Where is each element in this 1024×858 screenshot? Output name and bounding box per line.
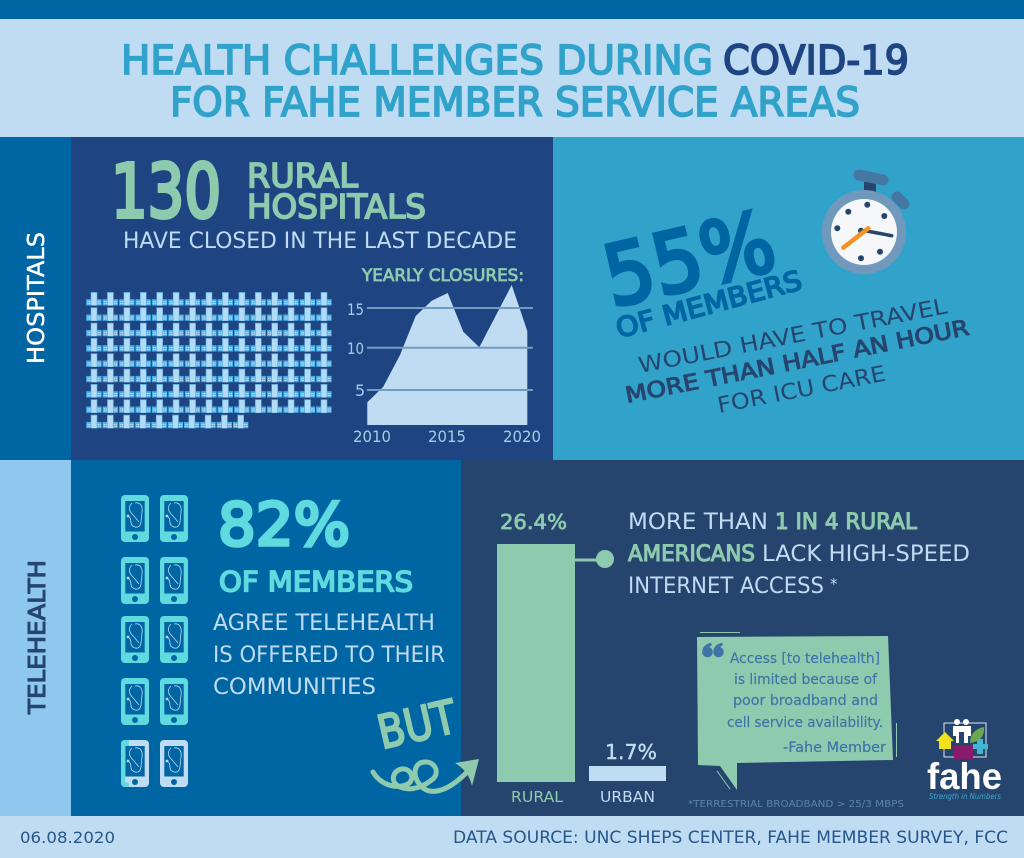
big number 130: 130 — [111, 149, 221, 235]
title — [121, 38, 909, 126]
logo: fahe — [927, 719, 1002, 801]
icon grid: phones with stethoscopes — [121, 495, 188, 787]
callout: member quote: cell service availability. — [727, 715, 883, 731]
panel: hospitals section label — [0, 137, 71, 460]
icon: quote marks — [702, 643, 724, 657]
callout: BUT with arrow: BUT — [372, 689, 462, 760]
footer band — [0, 816, 1024, 858]
broadband statement: * — [830, 575, 838, 593]
telehealth statement: IS OFFERED TO THEIR — [213, 643, 445, 668]
chart: yearly closures area chart: 2015 — [428, 427, 466, 446]
telehealth statement — [213, 611, 445, 700]
logo: fahe: Strength in Numbers — [929, 792, 1001, 801]
bar chart: rural vs urban — [497, 510, 666, 806]
panel: ICU travel time — [553, 137, 1024, 460]
panel: hospitals section label: HOSPITALS — [24, 232, 50, 364]
chart: yearly closures area chart: 2010 — [353, 427, 391, 446]
icon: stopwatch — [822, 175, 906, 274]
broadband statement: INTERNET ACCESS — [628, 574, 824, 599]
travel statement — [623, 294, 971, 419]
title banner — [0, 19, 1024, 137]
telehealth statement: AGREE TELEHEALTH — [213, 611, 435, 636]
callout: member quote: Access [to telehealth] — [730, 651, 880, 667]
broadband statement — [628, 510, 970, 599]
panel: rural hospital closures — [71, 137, 553, 460]
telehealth statement: COMMUNITIES — [213, 675, 376, 700]
chart: yearly closures area chart: 10 — [347, 339, 364, 358]
callout: member quote: -Fahe Member — [783, 740, 886, 756]
panel: broadband access — [461, 460, 1024, 816]
chart: yearly closures area chart — [347, 266, 541, 446]
title: FOR FAHE MEMBER SERVICE AREAS — [170, 80, 860, 126]
panel: telehealth section label: TELEHEALTH — [25, 560, 51, 715]
broadband statement: LACK HIGH-SPEED — [762, 542, 970, 567]
rural hospitals heading: RURAL — [247, 156, 359, 195]
logo: fahe: fahe — [927, 756, 1002, 797]
stat 55% of members: OF MEMBERS — [613, 265, 805, 345]
travel statement: WOULD HAVE TO TRAVEL — [636, 294, 950, 379]
footnote: *TERRESTRIAL BROADBAND > 25/3 MBPS — [688, 799, 904, 810]
travel statement: MORE THAN HALF AN HOUR — [623, 316, 971, 409]
bar chart: rural vs urban: 1.7% — [605, 740, 657, 764]
closure statement: HAVE CLOSED IN THE LAST DECADE — [123, 229, 517, 254]
panel: telehealth section label — [0, 460, 71, 816]
bar chart: rural vs urban: RURAL — [511, 788, 564, 806]
chart: yearly closures area chart: 5 — [355, 381, 365, 400]
of members: OF MEMBERS — [219, 565, 413, 598]
chart: yearly closures area chart: 15 — [347, 300, 364, 319]
bar chart: rural vs urban: 26.4% — [500, 510, 567, 534]
rural hospitals heading — [247, 156, 426, 226]
date: 06.08.2020 — [20, 828, 115, 847]
bar chart: rural vs urban: URBAN — [600, 788, 655, 806]
travel statement: FOR ICU CARE — [715, 362, 888, 419]
top band — [0, 0, 1024, 19]
callout: BUT with arrow — [372, 689, 479, 791]
panel: telehealth offered — [71, 460, 461, 816]
chart: yearly closures area chart: YEARLY CLOSURES: — [361, 266, 524, 286]
title: COVID-19 — [723, 38, 909, 84]
stat 82%: 82% — [218, 490, 350, 559]
chart: yearly closures area chart: 2020 — [503, 427, 541, 446]
title: HEALTH CHALLENGES DURING — [121, 38, 713, 84]
broadband statement: MORE THAN — [628, 510, 768, 535]
hospital icon grid: 130 buildings — [86, 292, 332, 428]
data source: DATA SOURCE: UNC SHEPS CENTER, FAHE MEMBER SURVEY, FCC — [453, 828, 1008, 847]
callout: member quote: poor broadband and — [733, 693, 878, 709]
broadband statement: AMERICANS — [628, 542, 755, 567]
rural hospitals heading: HOSPITALS — [247, 187, 426, 226]
callout: member quote: is limited because of — [734, 672, 878, 688]
broadband statement: 1 IN 4 RURAL — [775, 510, 918, 535]
stat 55% of members: 55% — [594, 192, 784, 326]
callout: member quote — [697, 632, 897, 790]
